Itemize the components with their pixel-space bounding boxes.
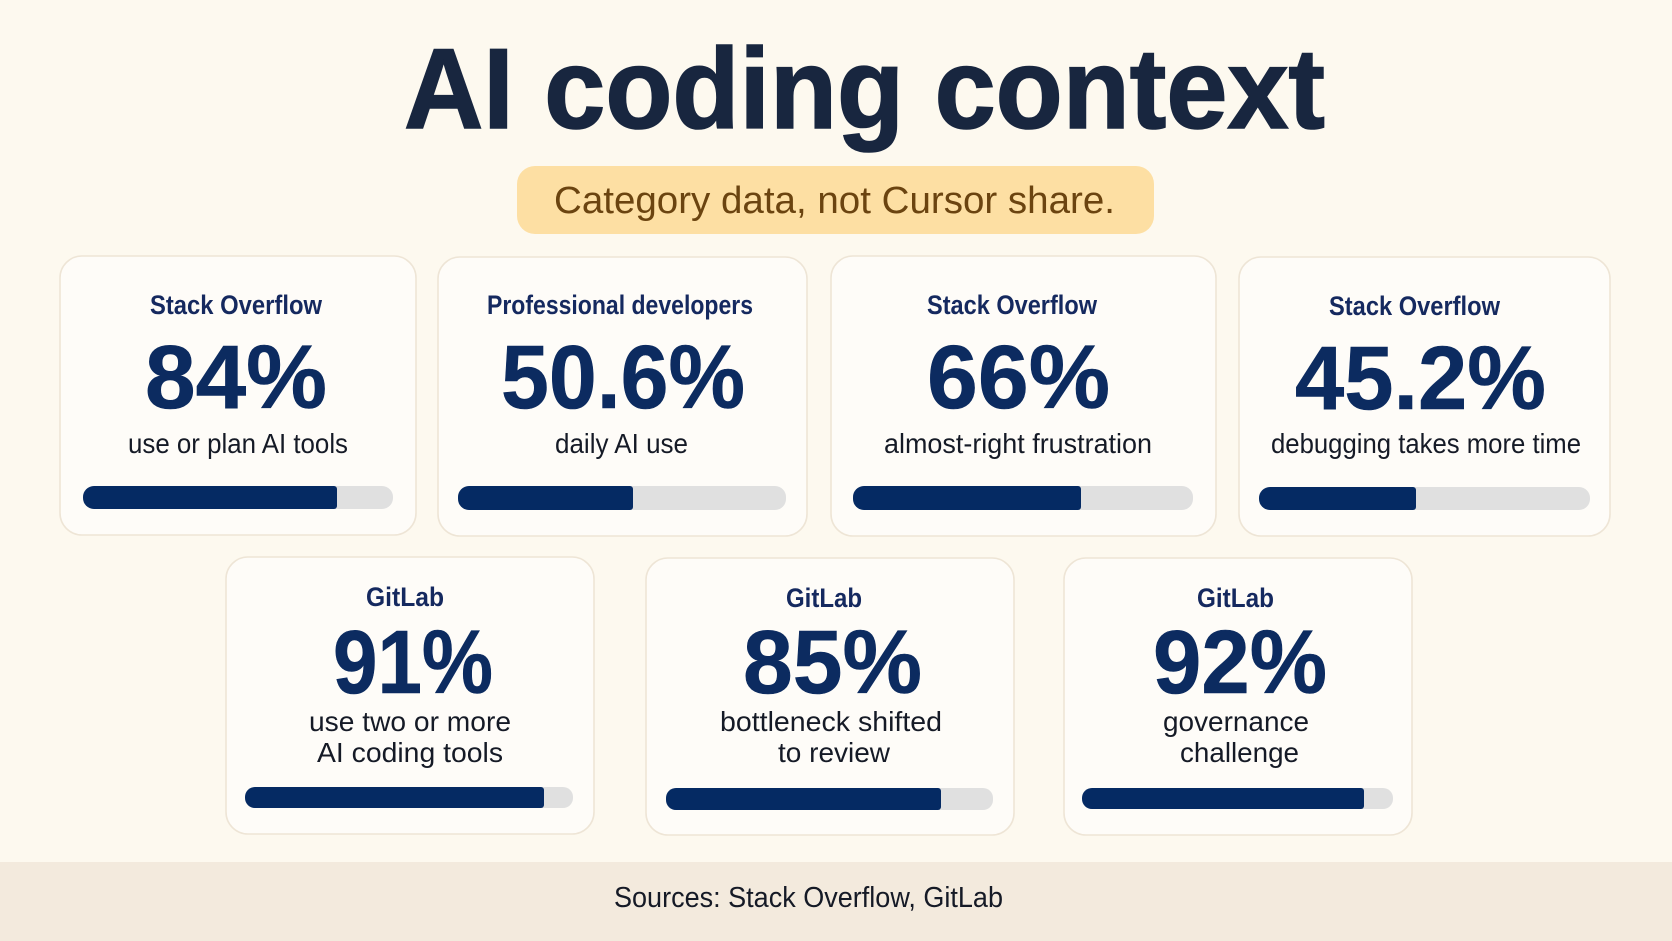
description: debugging takes more time bbox=[1271, 428, 1581, 459]
description: to review bbox=[778, 737, 891, 768]
panel: 92% governance challenge bbox=[1064, 558, 1412, 835]
progress bar bbox=[1082, 788, 1393, 809]
stat value: 66% bbox=[927, 328, 1110, 428]
description: daily AI use bbox=[555, 428, 688, 459]
description bbox=[720, 706, 942, 768]
description: almost-right frustration bbox=[884, 428, 1152, 459]
source label: Stack Overflow bbox=[150, 290, 322, 320]
description: bottleneck shifted bbox=[720, 706, 942, 737]
description: use or plan AI tools bbox=[128, 428, 348, 459]
progress bar bbox=[458, 486, 786, 510]
description: AI coding tools bbox=[317, 737, 503, 768]
footer: sources bbox=[0, 862, 1672, 941]
callout: category data note: Category data, not Cursor share. bbox=[554, 180, 1115, 222]
progress bar bbox=[853, 486, 1193, 510]
title: AI coding context bbox=[404, 26, 1325, 153]
callout: category data note bbox=[517, 166, 1154, 234]
panel: 66% almost-right frustration bbox=[831, 256, 1216, 536]
source label: Professional developers bbox=[487, 290, 753, 320]
progress bar bbox=[83, 486, 393, 509]
source label: GitLab bbox=[366, 582, 444, 612]
stat value: 50.6% bbox=[501, 328, 745, 428]
description: governance bbox=[1163, 706, 1309, 737]
source label: GitLab bbox=[786, 583, 862, 613]
progress bar bbox=[1259, 487, 1590, 510]
source label: GitLab bbox=[1197, 583, 1274, 613]
stat value: 45.2% bbox=[1295, 329, 1546, 429]
description bbox=[1163, 706, 1309, 768]
stat value: 85% bbox=[743, 613, 922, 713]
source label: Stack Overflow bbox=[1329, 291, 1500, 321]
progress bar bbox=[245, 787, 573, 808]
progress bar bbox=[666, 788, 993, 810]
description bbox=[309, 706, 511, 768]
panel: 50.6% daily AI use bbox=[438, 257, 807, 536]
description: challenge bbox=[1180, 737, 1299, 768]
panel: 85% bottleneck shifted to review bbox=[646, 558, 1014, 835]
stat value: 92% bbox=[1153, 613, 1327, 713]
stat value: 84% bbox=[145, 328, 327, 428]
footer: sources: Sources: Stack Overflow, GitLab bbox=[614, 882, 1003, 914]
stat value: 91% bbox=[333, 613, 493, 713]
source label: Stack Overflow bbox=[927, 290, 1097, 320]
description: use two or more bbox=[309, 706, 511, 737]
panel: 91% use two or more AI coding tools bbox=[226, 557, 594, 834]
panel: 45.2% debugging takes more time bbox=[1239, 257, 1610, 536]
panel: 84% use or plan AI tools bbox=[60, 256, 416, 535]
